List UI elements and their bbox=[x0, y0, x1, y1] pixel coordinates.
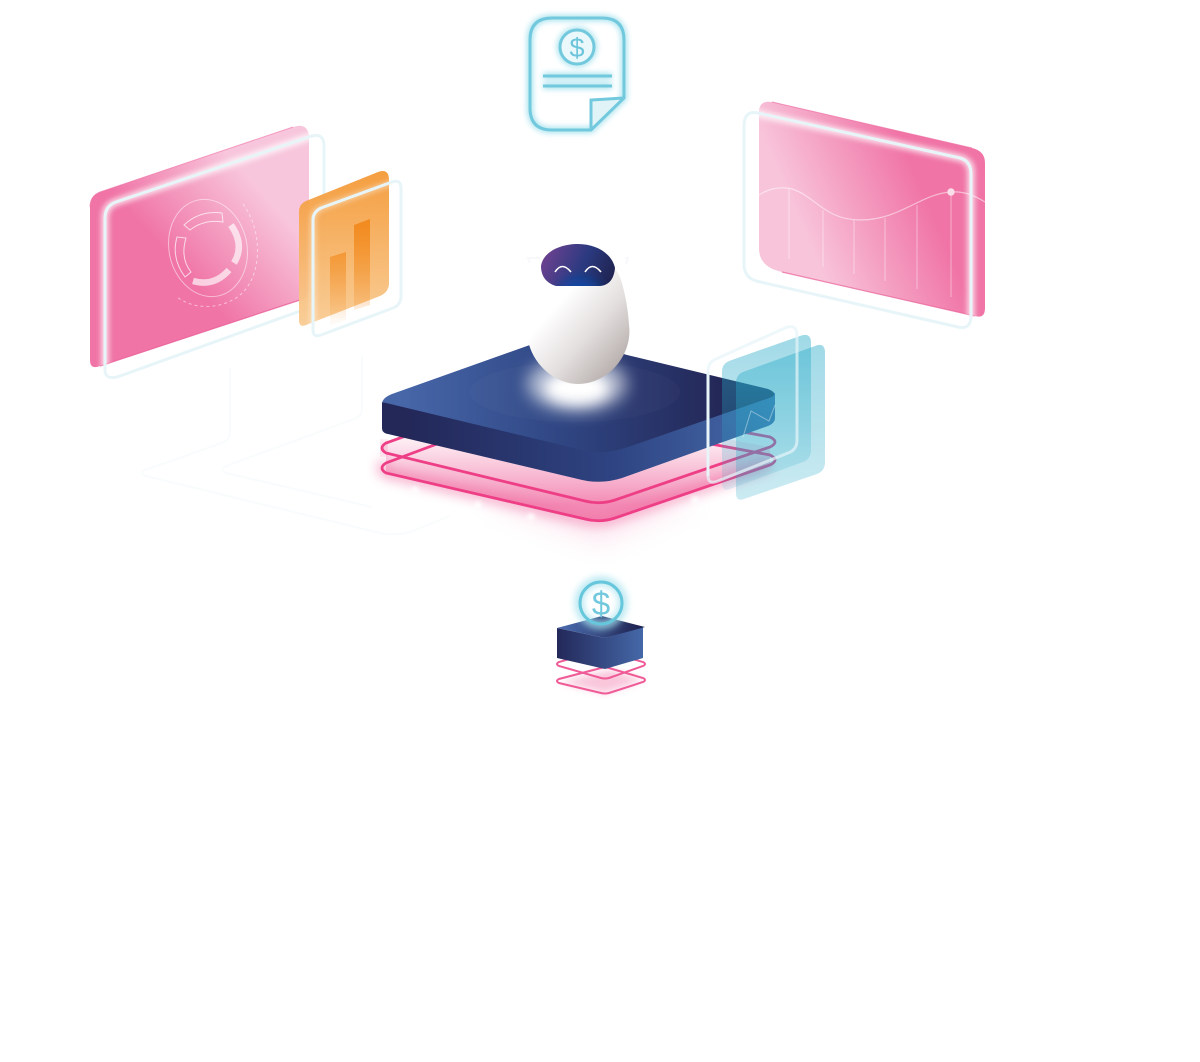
pink glowing layers beneath platform bbox=[382, 394, 775, 548]
panel: teal glass cards bbox=[708, 327, 825, 500]
panel: orange bar chart card bbox=[299, 171, 401, 336]
robot visor bbox=[541, 244, 615, 286]
mini line chart bbox=[743, 405, 775, 437]
small platform with coin bbox=[557, 581, 645, 694]
icon: invoice document: $ bbox=[569, 33, 585, 63]
robot bbox=[527, 244, 629, 384]
glass card frame bbox=[708, 327, 797, 482]
light under robot bbox=[527, 356, 627, 412]
panel: line chart screen bbox=[744, 102, 985, 328]
central navy platform bbox=[382, 335, 775, 482]
icon: dollar coin: $ bbox=[592, 585, 610, 622]
icon: invoice document bbox=[530, 18, 624, 130]
line chart bbox=[759, 188, 985, 297]
glow dots bbox=[412, 486, 698, 520]
isometric illustration bbox=[90, 12, 985, 696]
bars bbox=[330, 252, 346, 325]
small navy box bbox=[557, 627, 643, 669]
panel: donut gauge screen bbox=[90, 126, 324, 378]
faint circuit traces on the floor bbox=[142, 355, 450, 534]
gauge rings bbox=[160, 192, 258, 306]
robot body bbox=[527, 268, 629, 384]
small pink layers bbox=[557, 650, 645, 694]
